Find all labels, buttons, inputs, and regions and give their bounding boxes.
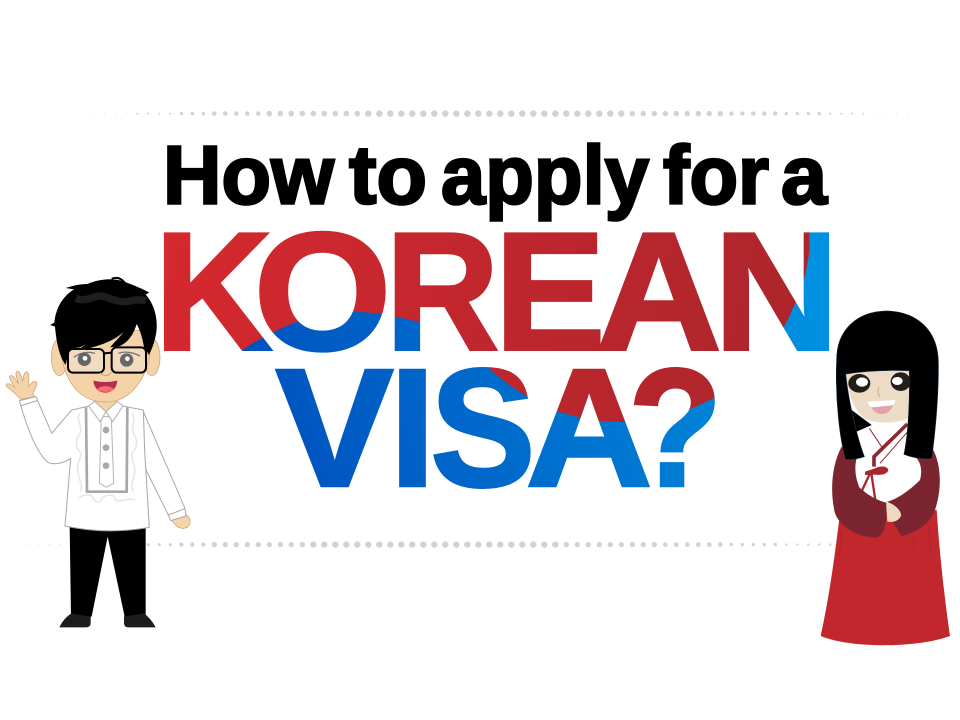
man: ears	[51, 339, 160, 376]
woman: left sleeve	[832, 447, 887, 537]
man: grey placket frame	[86, 407, 127, 492]
title word: VISA?: A	[526, 334, 653, 522]
title word: KOREAN: R	[386, 198, 499, 386]
woman: nose	[878, 387, 880, 397]
woman: face	[846, 370, 910, 423]
woman: clasped hands	[886, 502, 901, 522]
man: hair curl	[112, 278, 127, 287]
man: hair highlight	[76, 296, 146, 302]
woman: hair	[836, 311, 938, 459]
character: woman in hanbok	[821, 311, 950, 645]
title word: KOREAN: N	[714, 198, 839, 386]
top dotted divider	[93, 113, 908, 115]
man: buttons	[103, 427, 109, 469]
man: embroidery	[76, 413, 137, 502]
man: eyes	[78, 353, 133, 367]
woman: right sleeve	[887, 450, 940, 536]
man: lowered sleeve	[143, 410, 186, 521]
man: waving hand	[6, 371, 37, 399]
woman: right eye	[891, 372, 911, 391]
heading: How to apply for a: How	[163, 128, 334, 222]
man: shirt body and raised sleeve	[19, 397, 149, 531]
woman: blouse	[855, 422, 921, 503]
man: right hand	[172, 515, 190, 528]
woman: bow ribbons	[861, 473, 875, 500]
heading: How to apply for a: to	[349, 128, 427, 222]
woman: teeth	[868, 400, 895, 407]
woman: mouth	[871, 405, 893, 414]
title word: KOREAN: K	[154, 198, 272, 386]
man: cuff line	[168, 509, 185, 515]
woman: bow	[865, 467, 888, 475]
woman: back hair	[852, 410, 872, 432]
heading: How to apply for a: for	[663, 128, 769, 222]
bottom dotted divider	[27, 544, 835, 546]
title word: KOREAN: E	[494, 198, 606, 386]
character: waving man in barong	[6, 278, 190, 627]
man: legs	[70, 527, 146, 618]
man: face	[60, 330, 151, 402]
man: hair	[50, 279, 157, 365]
title word: VISA?: S	[430, 334, 535, 522]
woman: left eye	[848, 374, 870, 393]
title word: KOREAN: A	[596, 198, 722, 386]
title word: KOREAN: O	[254, 198, 392, 386]
man: tongue	[97, 386, 114, 392]
man: centre placket	[99, 417, 114, 487]
man: shoes	[59, 613, 156, 627]
man: collar	[89, 401, 123, 422]
woman: skirt pleats	[839, 527, 931, 557]
man: raised cuff line	[20, 401, 37, 406]
woman: collar	[869, 424, 908, 467]
man: glasses bridge	[104, 350, 112, 356]
title word: VISA?: V	[276, 334, 393, 522]
heading: How to apply for a: apply	[441, 128, 649, 222]
man: eyebrow lines	[74, 352, 140, 357]
heading: How to apply for a: a	[781, 128, 828, 222]
title word: VISA?: ?	[628, 334, 722, 522]
man: nose	[100, 373, 111, 376]
woman: skirt	[821, 510, 950, 645]
title word: VISA?: I	[390, 334, 435, 522]
man: neck	[93, 395, 118, 412]
man: mouth	[93, 381, 117, 393]
man: glasses lenses	[68, 347, 146, 373]
